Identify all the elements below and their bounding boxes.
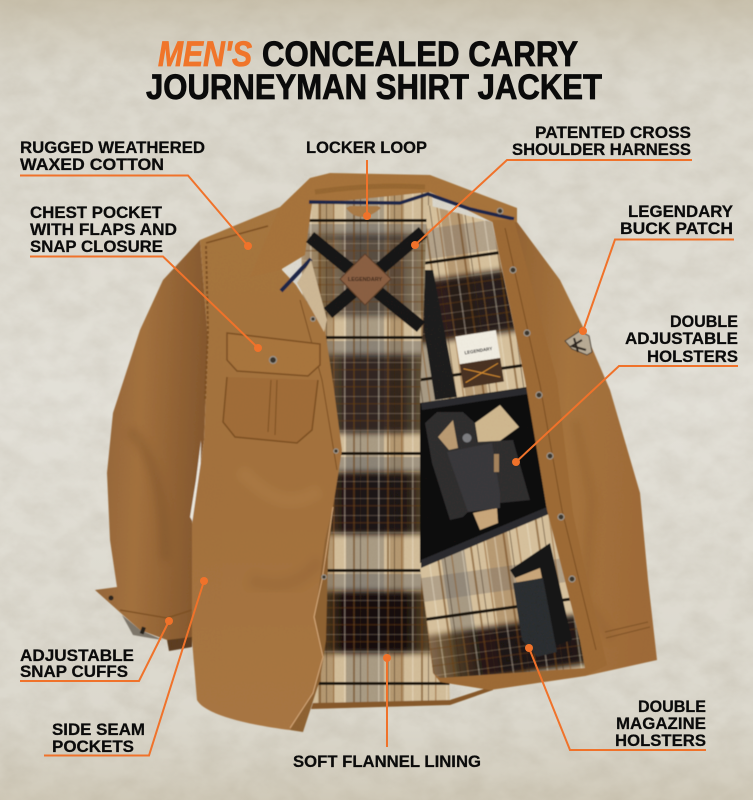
callout: locker loop: [306, 139, 427, 220]
callout: side seam pockets: [44, 577, 208, 756]
locker loop: [346, 206, 381, 217]
legendary label patch: [455, 330, 504, 388]
callout: double magazine holsters: HOLSTERS: [615, 732, 706, 750]
icon: legendary buck patch: [565, 331, 592, 355]
callout: chest pocket: SNAP CLOSURE: [30, 238, 163, 256]
title: JOURNEYMAN SHIRT JACKET: [146, 68, 602, 107]
callout: patented cross shoulder harness: SHOULDER HARNESS: [512, 141, 691, 159]
jacket photo: [95, 172, 657, 732]
lining bottom hem: [311, 686, 493, 709]
callout: soft flannel lining: SOFT FLANNEL LINING: [293, 753, 481, 771]
callout: locker loop: LOCKER LOOP: [306, 139, 427, 157]
black vertical strap: [424, 270, 457, 400]
centre flannel lining: [300, 190, 450, 710]
callout: legendary buck patch: [579, 203, 734, 335]
dark tan inner placket strip: [290, 507, 333, 732]
callout: side seam pockets: POCKETS: [52, 738, 134, 756]
callout: adjustable snap cuffs: [20, 617, 173, 681]
icon: plaid cuff: [122, 615, 192, 651]
callout: patented cross shoulder harness: PATENTED CROSS: [535, 124, 691, 142]
collar navy binding: [309, 194, 514, 219]
title: MEN'S: [158, 35, 252, 74]
callout: double adjustable holsters: HOLSTERS: [647, 348, 738, 366]
fabric grain: [334, 220, 542, 684]
left front panel: [192, 207, 342, 730]
callout: soft flannel lining: [293, 654, 481, 771]
callout: double adjustable holsters: DOUBLE: [670, 313, 738, 331]
right inner flannel: [419, 205, 586, 679]
callout: double magazine holsters: DOUBLE: [638, 698, 706, 716]
callout: chest pocket: [30, 204, 262, 352]
left edge plaid strip: [297, 260, 327, 332]
double magazine holster: [510, 543, 572, 657]
callout: double magazine holsters: MAGAZINE: [616, 715, 706, 733]
callout: rugged weathered waxed cotton: WAXED COTTON: [20, 156, 164, 174]
callout: double adjustable holsters: ADJUSTABLE: [625, 330, 738, 348]
title: CONCEALED CARRY: [262, 35, 578, 74]
callout: adjustable snap cuffs: ADJUSTABLE: [20, 647, 134, 665]
callout: patented cross shoulder harness: [411, 124, 692, 249]
harness leather diamond patch: LEGENDARY: [348, 277, 382, 283]
icon: pocket snap: [270, 356, 276, 364]
harness leather diamond patch: [340, 254, 391, 305]
callout: chest pocket: CHEST POCKET: [30, 204, 162, 222]
callout: chest pocket: WITH FLAPS AND: [30, 221, 177, 239]
callout: adjustable snap cuffs: SNAP CUFFS: [20, 663, 128, 681]
collar: [250, 173, 517, 277]
right front placket: [433, 220, 607, 690]
left sleeve: [95, 240, 208, 640]
cross shoulder harness straps: [310, 232, 423, 327]
right sleeve: [490, 200, 657, 676]
callout: side seam pockets: SIDE SEAM: [52, 721, 145, 739]
callout: legendary buck patch: LEGENDARY: [628, 203, 733, 221]
callout: legendary buck patch: BUCK PATCH: [620, 220, 733, 238]
chest pocket with flap: [223, 333, 320, 443]
placket snaps: [311, 208, 575, 582]
double adjustable holster with pistol: [425, 405, 530, 530]
callout: rugged weathered waxed cotton: RUGGED WEATHERED: [20, 139, 205, 157]
legendary label patch: LEGENDARY: [464, 346, 493, 355]
title: [146, 35, 602, 107]
callout: double adjustable holsters: [512, 313, 738, 466]
gap between sleeve and body: [190, 440, 201, 524]
callout: double magazine holsters: [525, 644, 706, 750]
callout: rugged weathered waxed cotton: [20, 139, 252, 250]
black holster panel: [420, 387, 547, 563]
